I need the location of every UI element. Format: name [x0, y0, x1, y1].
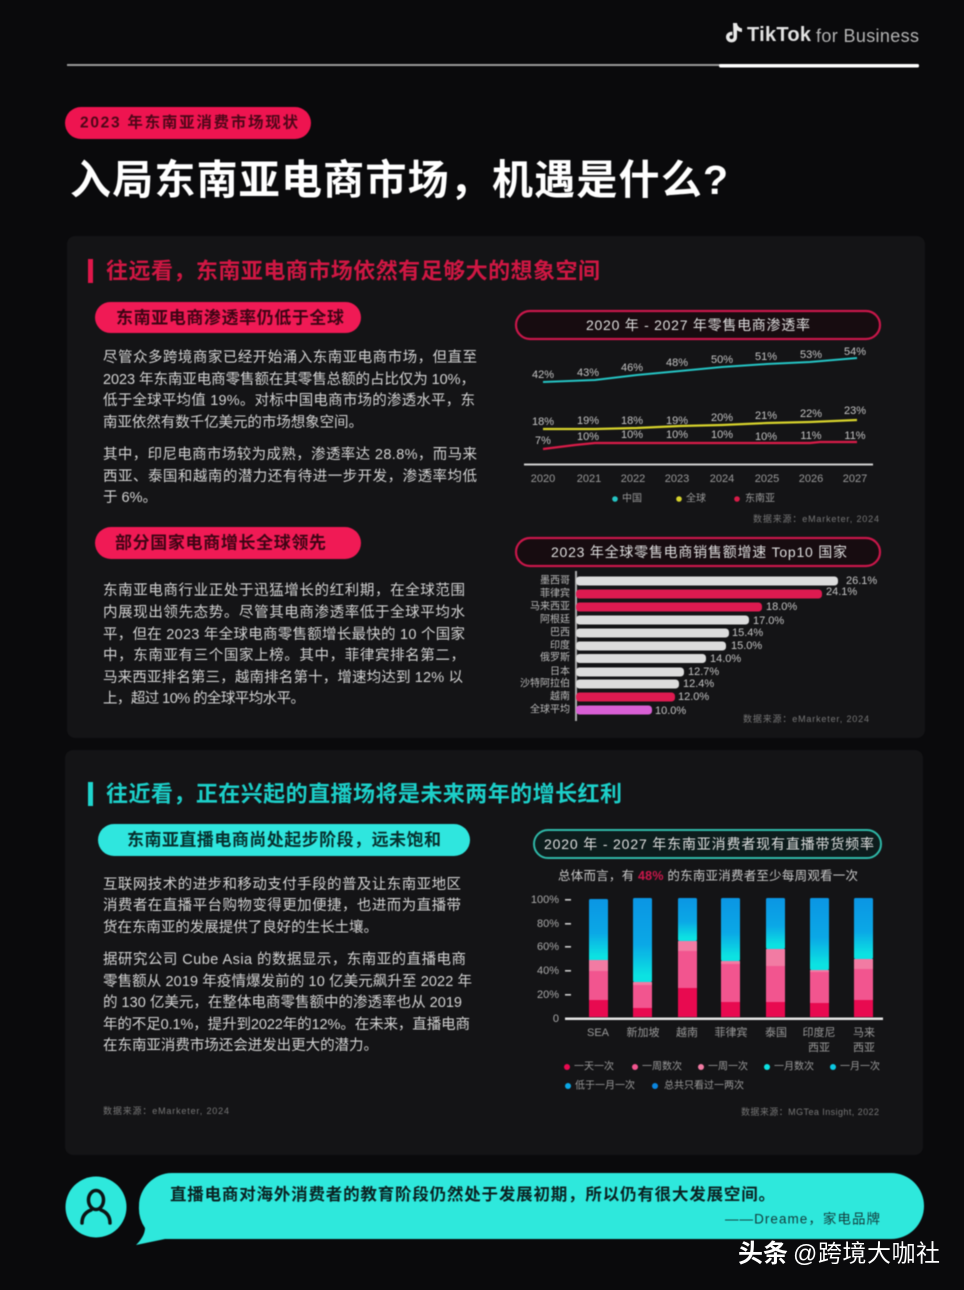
- source note: 数据来源：eMarketer, 2024: [753, 513, 879, 524]
- text block: livestream paragraphs: 零售额从 2019 年疫情爆发前的 10 亿美元飙升至 2022 年: [103, 973, 472, 990]
- icon: person avatar: [66, 1176, 126, 1238]
- bar chart: top 10 e-commerce growth 2023: 阿根廷: [540, 612, 570, 626]
- stacked bar chart: livestream viewing frequency: 新加坡: [626, 1025, 660, 1039]
- stacked bar chart: livestream viewing frequency: 20%: [537, 989, 559, 1001]
- text block: growth paragraph: 上，超过 10% 的全球平均水平。: [103, 689, 305, 707]
- line chart: e-commerce penetration 2020-2027: 11%: [800, 430, 822, 442]
- chart subtitle: 总体而言，有 48% 的东南亚消费者至少每周观看一次: [558, 868, 858, 883]
- stacked bar chart: livestream viewing frequency: 菲律宾: [714, 1025, 748, 1039]
- legend: 全球: [686, 492, 706, 504]
- bar chart: top 10 e-commerce growth 2023: 14.0%: [710, 653, 741, 665]
- source note: 数据来源：MGTea Insight, 2022: [741, 1106, 879, 1117]
- line chart: e-commerce penetration 2020-2027: 18%: [621, 415, 643, 427]
- bar chart: top 10 e-commerce growth 2023: 菲律宾: [540, 586, 570, 600]
- legend: 一月一次: [840, 1060, 880, 1072]
- panel: near-term outlook: [65, 750, 923, 1155]
- line chart: e-commerce penetration 2020-2027: 54%: [844, 346, 866, 358]
- stacked bar chart: livestream viewing frequency: 0: [553, 1013, 559, 1025]
- bar chart: top 10 e-commerce growth 2023: 12.4%: [683, 678, 714, 690]
- line chart: e-commerce penetration 2020-2027: 10%: [621, 429, 643, 441]
- line chart: e-commerce penetration 2020-2027: 2027: [843, 473, 867, 485]
- chart title pill: 2023 年全球零售电商销售额增速 Top10 国家: [551, 544, 847, 560]
- section heading: long-term: 往远看，东南亚电商市场依然有足够大的想象空间: [106, 258, 600, 284]
- bar chart: top 10 e-commerce growth 2023: [516, 538, 880, 724]
- text block: penetration paragraphs: 其中，印尼电商市场较为成熟，渗透率达 28.8%，而马来: [103, 445, 478, 463]
- line chart: e-commerce penetration 2020-2027: 2025: [755, 473, 779, 485]
- legend: 中国: [622, 492, 642, 504]
- line chart: e-commerce penetration 2020-2027: 2026: [799, 473, 823, 485]
- text block: penetration paragraphs: 南亚依然有数千亿美元的市场想象空间。: [103, 414, 363, 431]
- speech bubble: [136, 1173, 924, 1245]
- stacked bar chart: livestream viewing frequency: 泰国: [765, 1025, 787, 1039]
- line chart: e-commerce penetration 2020-2027: 51%: [755, 351, 777, 363]
- bar chart: top 10 e-commerce growth 2023: 日本: [550, 664, 570, 678]
- bar chart: top 10 e-commerce growth 2023: 15.4%: [732, 627, 763, 639]
- line chart: e-commerce penetration 2020-2027: 2024: [710, 473, 734, 485]
- sub-heading pill: livestream early stage: 东南亚直播电商尚处起步阶段，远未饱和: [127, 830, 441, 850]
- chart title pill: 2020 年 - 2027 年东南亚消费者现有直播带货频率: [544, 836, 874, 852]
- bar: Vietnam: [678, 898, 697, 1017]
- line chart: e-commerce penetration 2020-2027: 10%: [755, 431, 777, 443]
- tag pill: 2023 market status: 2023 年东南亚消费市场现状: [80, 112, 298, 132]
- watermark: @跨境大咖社: [793, 1240, 940, 1268]
- line chart: e-commerce penetration 2020-2027: 2020: [531, 473, 555, 485]
- stacked bar chart: livestream viewing frequency: SEA: [587, 1027, 610, 1039]
- tag pill: 2023 market status: [65, 107, 311, 139]
- text block: livestream paragraphs: 据研究公司 Cube Asia 的数据显示，东南亚的直播电商: [103, 951, 466, 968]
- title: 入局东南亚电商市场，机遇是什么?: [70, 157, 728, 203]
- bar: Philippines: [721, 898, 740, 1017]
- legend: [612, 492, 775, 504]
- legend: 总共只看过一两次: [664, 1078, 744, 1092]
- stacked bar chart: livestream viewing frequency: 越南: [676, 1025, 698, 1039]
- stacked bar chart: livestream viewing frequency: 印度尼: [802, 1025, 836, 1039]
- legend: 一天一次: [574, 1060, 614, 1072]
- watermark: 头条: [738, 1240, 788, 1268]
- line chart: e-commerce penetration 2020-2027: 50%: [711, 354, 733, 366]
- text block: growth paragraph: 内展现出领先态势。尽管其电商渗透率低于全球平均水: [103, 603, 466, 621]
- bar chart: top 10 e-commerce growth 2023: 越南: [550, 690, 570, 702]
- bar chart: top 10 e-commerce growth 2023: 印度: [550, 638, 570, 652]
- text block: growth paragraph: 马来西亚排名第三，越南排名第十，增速均达到 12% 以: [103, 668, 463, 686]
- line chart: e-commerce penetration 2020-2027: 2021: [577, 473, 601, 485]
- source note: 数据来源：eMarketer, 2024: [103, 1105, 229, 1116]
- legend: 东南亚: [745, 492, 775, 504]
- legend: 低于一月一次: [575, 1078, 635, 1092]
- line chart: e-commerce penetration 2020-2027: 18%: [532, 416, 554, 428]
- text block: penetration paragraphs: 尽管众多跨境商家已经开始涌入东南亚电商市场，但直至: [103, 348, 477, 366]
- text block: growth paragraph: 东南亚电商行业正处于迅猛增长的红利期，在全球范围: [103, 581, 465, 599]
- bar chart: top 10 e-commerce growth 2023: 巴西: [550, 626, 570, 638]
- line chart: e-commerce penetration 2020-2027: 10%: [577, 431, 599, 443]
- legend: 一周数次: [642, 1060, 682, 1072]
- text block: penetration paragraphs: 2023 年东南亚电商零售额在其零售总额的占比仅为 10%，: [103, 371, 475, 388]
- source note: 数据来源：eMarketer, 2024: [743, 713, 869, 724]
- line chart: e-commerce penetration 2020-2027: 7%: [535, 435, 551, 447]
- sub-heading pill: penetration: [95, 302, 361, 333]
- line chart: e-commerce penetration 2020-2027: 21%: [755, 410, 777, 422]
- line chart: e-commerce penetration 2020-2027: 10%: [666, 429, 688, 441]
- bar chart: top 10 e-commerce growth 2023: 墨西哥: [540, 574, 570, 586]
- stacked bar chart: livestream viewing frequency: 西亚: [853, 1042, 875, 1054]
- icon: TikTok note: [726, 23, 742, 42]
- line chart: e-commerce penetration 2020-2027: 22%: [800, 408, 822, 420]
- text block: livestream paragraphs: 消费者在直播平台购物变得更加便捷，也进而为直播带: [103, 897, 461, 914]
- stacked bar chart: livestream viewing frequency: 40%: [537, 965, 559, 977]
- text block: livestream paragraphs: 年的不足0.1%，提升到2022年的12%。在未来，直播电商: [103, 1016, 470, 1033]
- line chart: e-commerce penetration 2020-2027: 42%: [532, 369, 554, 381]
- chart title pill: [516, 311, 880, 339]
- line chart: e-commerce penetration 2020-2027: 2023: [665, 473, 689, 485]
- line chart: e-commerce penetration 2020-2027: 19%: [666, 415, 688, 427]
- line chart: e-commerce penetration 2020-2027: 43%: [577, 367, 599, 379]
- text block: growth paragraph: [103, 581, 466, 707]
- text block: livestream paragraphs: 货在东南亚的发展提供了良好的生长土壤。: [103, 918, 378, 936]
- text block: penetration paragraphs: [103, 348, 478, 506]
- sub-heading pill: growth leaders: 部分国家电商增长全球领先: [115, 532, 326, 552]
- line chart: e-commerce penetration 2020-2027: 48%: [666, 357, 688, 369]
- text block: growth paragraph: 平，但在 2023 年全球电商零售额增长最快的 10 个国家: [103, 625, 465, 643]
- sub-heading pill: livestream early stage: [98, 824, 470, 856]
- text block: penetration paragraphs: 低于全球平均值 19%。对标中国电商市场的渗透水平，东: [103, 391, 475, 409]
- line chart: e-commerce penetration 2020-2027: 53%: [800, 349, 822, 361]
- text block: growth paragraph: 中，东南亚有三个国家上榜。其中，菲律宾排名第二，: [103, 646, 465, 664]
- line chart: e-commerce penetration 2020-2027: 19%: [577, 415, 599, 427]
- bar chart: top 10 e-commerce growth 2023: 马来西亚: [530, 600, 570, 612]
- stacked bar chart: livestream viewing frequency: 西亚: [808, 1042, 830, 1054]
- speech bubble: ——Dreame，家电品牌: [725, 1210, 880, 1226]
- text block: livestream paragraphs: 互联网技术的进步和移动支付手段的普及让东南亚地区: [103, 876, 461, 893]
- bar chart: top 10 e-commerce growth 2023: 15.0%: [731, 640, 762, 652]
- sub-heading pill: penetration: 东南亚电商渗透率仍低于全球: [116, 308, 344, 328]
- stacked bar chart: livestream viewing frequency: [531, 830, 883, 1117]
- bar: Malaysia: [854, 898, 873, 1017]
- bar chart: top 10 e-commerce growth 2023: 26.1%: [846, 575, 877, 587]
- text block: penetration paragraphs: 于 6%。: [103, 490, 157, 506]
- text block: penetration paragraphs: 西亚、泰国和越南的潜力还有待进一步开发，渗透率均低: [103, 468, 478, 485]
- line chart: e-commerce penetration 2020-2027: 20%: [711, 412, 733, 424]
- logo suffix: for Business: [816, 26, 919, 46]
- stacked bar chart: livestream viewing frequency: 马来: [853, 1026, 875, 1039]
- bar: Thailand: [766, 898, 785, 1017]
- chart title pill: 2020 年 - 2027 年零售电商渗透率: [586, 317, 810, 333]
- line chart: e-commerce penetration 2020-2027: 10%: [711, 429, 733, 441]
- quote callout: [66, 1173, 924, 1245]
- bar chart: top 10 e-commerce growth 2023: 10.0%: [655, 705, 686, 717]
- bar chart: top 10 e-commerce growth 2023: 12.7%: [688, 666, 719, 678]
- bar: SEA: [589, 899, 608, 1017]
- bar chart: top 10 e-commerce growth 2023: 俄罗斯: [540, 650, 570, 664]
- line chart: e-commerce penetration 2020-2027: 2022: [621, 473, 645, 485]
- bar chart: top 10 e-commerce growth 2023: 12.0%: [678, 691, 709, 703]
- chart title pill: [534, 830, 881, 858]
- bar chart: top 10 e-commerce growth 2023: 全球平均: [530, 702, 570, 716]
- sub-heading pill: growth leaders: [95, 527, 361, 559]
- bar chart: top 10 e-commerce growth 2023: 沙特阿拉伯: [520, 676, 570, 690]
- bar chart: top 10 e-commerce growth 2023: 17.0%: [753, 615, 784, 627]
- text block: livestream paragraphs: 的 130 亿美元，在整体电商零售额中的渗透率也从 2019: [103, 994, 462, 1011]
- section heading: near-term: 往近看，正在兴起的直播场将是未来两年的增长红利: [106, 782, 622, 806]
- legend: 一月数次: [774, 1060, 814, 1072]
- bar: Indonesia: [810, 898, 829, 1017]
- bar chart: top 10 e-commerce growth 2023: 24.1%: [826, 586, 857, 598]
- legend: 一周一次: [708, 1060, 748, 1072]
- bar chart: top 10 e-commerce growth 2023: 18.0%: [766, 601, 797, 613]
- chart title pill: [516, 538, 880, 566]
- logo wordmark: TikTok: [747, 24, 812, 46]
- legend: [564, 1060, 880, 1092]
- bar: Singapore: [633, 898, 652, 1017]
- text block: livestream paragraphs: [103, 876, 472, 1054]
- line chart: e-commerce penetration 2020-2027: 11%: [844, 430, 866, 442]
- speech bubble: 直播电商对海外消费者的教育阶段仍然处于发展初期，所以仍有很大发展空间。: [170, 1184, 775, 1204]
- line chart: e-commerce penetration 2020-2027: 23%: [844, 405, 866, 417]
- stacked bar chart: livestream viewing frequency: 100%: [531, 894, 559, 906]
- stacked bar chart: livestream viewing frequency: 60%: [537, 941, 559, 953]
- text block: livestream paragraphs: 在东南亚消费市场还会迸发出更大的潜力。: [103, 1037, 378, 1054]
- line chart: e-commerce penetration 2020-2027: [516, 311, 880, 524]
- panel: long-term outlook: [67, 236, 925, 738]
- line chart: e-commerce penetration 2020-2027: 46%: [621, 362, 643, 374]
- stacked bar chart: livestream viewing frequency: 80%: [537, 918, 559, 930]
- header: TikTok for Business logo and rule: [67, 23, 919, 68]
